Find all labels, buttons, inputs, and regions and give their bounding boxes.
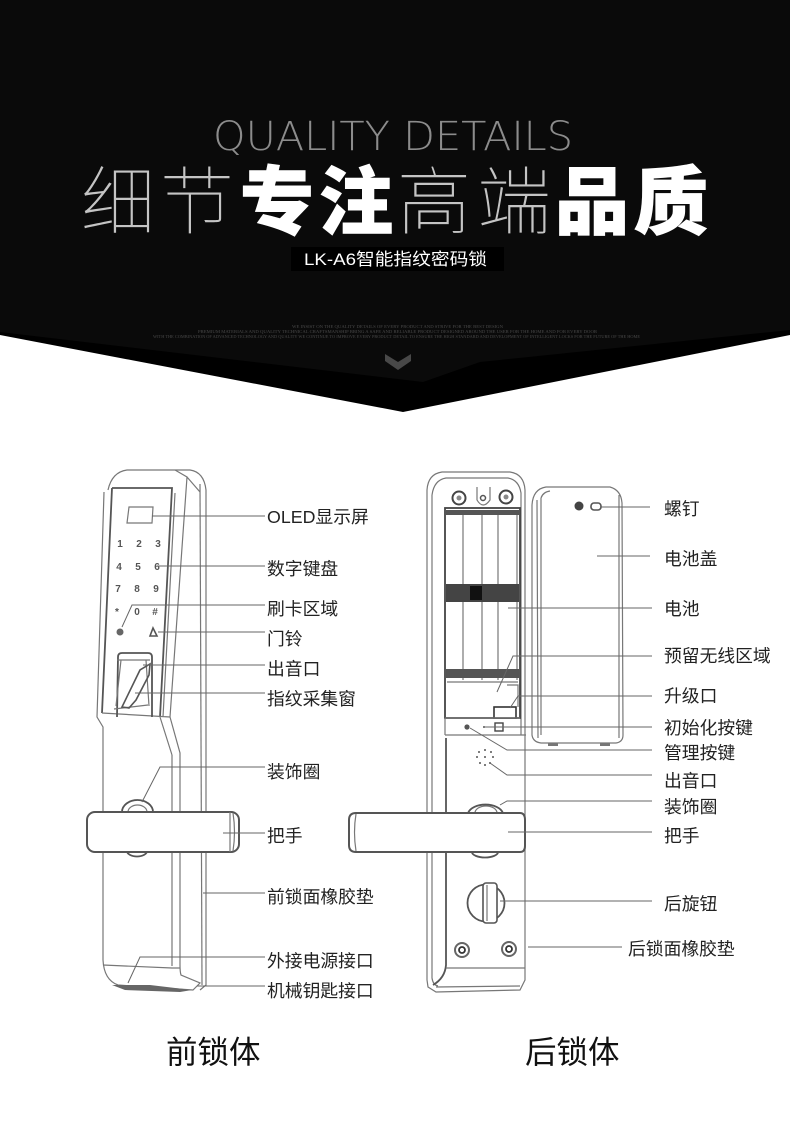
rear labels: 预留无线区域 (664, 646, 771, 666)
caption: front lock body: 前锁体 (166, 1034, 261, 1070)
keypad digits: 0 (134, 607, 140, 618)
rear handle (349, 813, 525, 852)
front labels: OLED显示屏 (267, 507, 369, 527)
fine print: WITH THE COMBINATION OF ADVANCED TECHNOLOGY AND QUALITY WE CONTINUE TO IMPROVE EVERY PRODUCT DETAIL TO ENSURE THE HIGH STANDARD AND DEVELOPMENT OF INTELLIGENT LOCKS FOR THE FUTURE OF THE HOME (153, 334, 641, 339)
rear labels: 电池盖 (664, 549, 717, 569)
rear labels: 把手 (664, 826, 700, 846)
fine print: PREMIUM MATERIALS AND QUALITY TECHNICAL CRAFTSMANSHIP BRING A SAFE AND RELIABLE PRODUCT DESIGNED AROUND THE USER FOR THE HOME AND FOR EVERY DOOR (198, 329, 597, 334)
fine print: WE INSIST ON THE QUALITY DETAILS OF EVERY PRODUCT AND STRIVE FOR THE BEST DESIGN (292, 324, 503, 329)
battery cavity (445, 508, 526, 735)
keypad digits: 3 (155, 539, 161, 550)
subtitle box: LK-A6智能指纹密码锁 (304, 250, 487, 269)
keypad digits: 6 (154, 562, 160, 573)
front labels (267, 507, 374, 1001)
keypad digits: 1 (117, 539, 123, 550)
icon: chevron down (385, 354, 411, 370)
front labels: 指纹采集窗 (267, 689, 356, 709)
front labels: 出音口 (267, 659, 320, 679)
rear labels: 螺钉 (664, 499, 700, 519)
rear labels: 后锁面橡胶垫 (628, 939, 735, 959)
speaker holes (476, 749, 494, 766)
fine print (153, 324, 641, 339)
rear labels: 管理按键 (664, 743, 735, 763)
keypad digits: 4 (116, 562, 122, 573)
battery cover (532, 487, 623, 746)
bottom screws (455, 942, 516, 957)
heading: chinese title: 专注 (240, 161, 393, 244)
keypad digits: 2 (136, 539, 142, 550)
front labels: 刷卡区域 (267, 599, 338, 619)
faceplate (102, 488, 172, 717)
front labels: 门铃 (267, 629, 303, 649)
heading: chinese title: 高端 (397, 161, 551, 244)
front labels: 装饰圈 (267, 762, 320, 782)
front labels: 把手 (267, 826, 303, 846)
keypad digits: 5 (135, 562, 141, 573)
rear leader lines (470, 507, 652, 947)
caption: rear lock body: 后锁体 (525, 1034, 620, 1070)
thumb turn knob (468, 883, 504, 923)
rear labels: 电池 (664, 599, 700, 619)
front labels: 机械钥匙接口 (267, 981, 374, 1001)
keypad digits: * (115, 607, 119, 618)
handle (87, 812, 239, 852)
heading: chinese title (81, 161, 708, 244)
front labels: 外接电源接口 (267, 951, 374, 971)
rear plate outline (427, 472, 525, 992)
rosette (122, 800, 153, 857)
heading: chinese title: 品质 (555, 161, 708, 244)
keypad digits (115, 539, 161, 636)
rear labels: 出音口 (664, 771, 717, 791)
rear rosette (468, 805, 503, 858)
front labels: 数字键盘 (267, 559, 338, 579)
back plate (108, 470, 206, 990)
heading: chinese title: 细节 (81, 161, 234, 244)
rear lock drawing (349, 472, 623, 992)
front labels: 前锁面橡胶垫 (267, 887, 374, 907)
front lock drawing (87, 470, 239, 992)
heading: quality details: QUALITY DETAILS (213, 114, 573, 160)
keypad digits: 8 (134, 584, 140, 595)
fingerprint window (114, 653, 152, 717)
keypad digits: 7 (115, 584, 121, 595)
rear labels: 升级口 (664, 686, 717, 706)
header banner (0, 0, 790, 412)
oled screen (127, 507, 153, 523)
front leader lines (122, 516, 265, 986)
reset buttons (464, 723, 503, 731)
bottom vent (112, 985, 192, 992)
top screws (452, 487, 512, 505)
subtitle box (291, 247, 504, 271)
rear labels (628, 499, 771, 959)
keypad digits: # (152, 607, 158, 618)
rear labels: 装饰圈 (664, 797, 717, 817)
keypad digits: 9 (153, 584, 159, 595)
rear labels: 后旋钮 (664, 894, 718, 914)
rear labels: 初始化按键 (664, 718, 753, 738)
